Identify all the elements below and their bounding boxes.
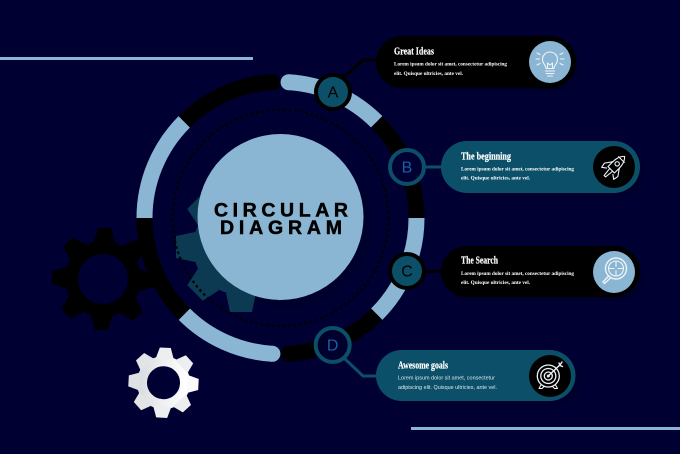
panel: Awesome goals xyxy=(376,350,581,406)
icon: rocket xyxy=(593,146,635,188)
node B xyxy=(390,150,424,184)
text: The Search body xyxy=(461,271,574,286)
node A xyxy=(316,75,350,109)
ring segment: black top left xyxy=(184,74,280,122)
node C xyxy=(390,254,424,288)
node D: D xyxy=(327,338,338,355)
centre circle with title xyxy=(198,134,364,300)
ring segment: black right upper xyxy=(377,122,416,218)
panel: The beginning xyxy=(441,141,645,198)
heading: Awesome goals: Awesome goals xyxy=(398,361,448,372)
heading: Great Ideas: Great Ideas xyxy=(394,47,434,58)
node B: B xyxy=(402,160,412,177)
ring segment: light top right xyxy=(281,74,377,122)
bottom right accent line xyxy=(411,427,680,430)
connector B xyxy=(424,166,443,168)
text: The beginning body: Lorem ipsum dolor sit amet, consectetur adipiscing xyxy=(461,166,574,172)
text: The beginning body xyxy=(461,166,574,182)
icon: white gear xyxy=(127,346,200,419)
icon: teal gear behind centre xyxy=(176,190,306,312)
top left accent line xyxy=(0,57,253,60)
text: The beginning body: elit. Quisque ultricies, ante vel. xyxy=(461,176,531,182)
connector A xyxy=(343,60,378,78)
icon: magnifier xyxy=(593,251,635,293)
dotted inner ring xyxy=(172,110,388,326)
title line 2: DIAGRAM xyxy=(220,217,342,239)
text: Great Ideas body: elit. Quisque ultricies, ante vel. xyxy=(394,71,464,77)
ring segment: light right lower xyxy=(377,218,416,314)
text: Great Ideas body xyxy=(394,62,507,77)
title line 1: CIRCULAR xyxy=(214,200,348,222)
ring segment: black bottom right xyxy=(281,314,377,362)
heading: The beginning: The beginning xyxy=(461,152,511,163)
node C: C xyxy=(401,264,413,281)
text: The Search body: Lorem ipsum dolor sit amet, consectetur adipiscing xyxy=(461,271,574,277)
icon: black gear xyxy=(50,226,156,332)
panel: The Search xyxy=(441,246,645,302)
node A: A xyxy=(328,85,339,102)
icon: target xyxy=(529,355,571,397)
heading: The Search: The Search xyxy=(461,256,498,267)
centre circle shadow xyxy=(205,142,371,308)
text: Great Ideas body: Lorem ipsum dolor sit amet, consectetur adipiscing xyxy=(394,62,507,68)
connector D xyxy=(345,359,378,376)
text: Awesome goals body: Lorem ipsum dolor sit amet, consectetur xyxy=(398,376,495,382)
text: Awesome goals body: adipiscing elit. Quisque ultricies, ante vel. xyxy=(398,385,497,391)
text: The Search body: elit. Quisque ultricies, ante vel. xyxy=(461,280,531,286)
icon: light bulb xyxy=(529,41,571,83)
connector C xyxy=(424,270,443,273)
node D xyxy=(316,328,350,362)
ring segment: light bottom left xyxy=(184,314,280,362)
segmented outer ring xyxy=(144,74,416,362)
ring segment: light left upper xyxy=(144,122,184,218)
panel: Great Ideas xyxy=(376,36,581,93)
text: Awesome goals body xyxy=(398,376,497,391)
ring segment: black left lower xyxy=(144,218,184,314)
